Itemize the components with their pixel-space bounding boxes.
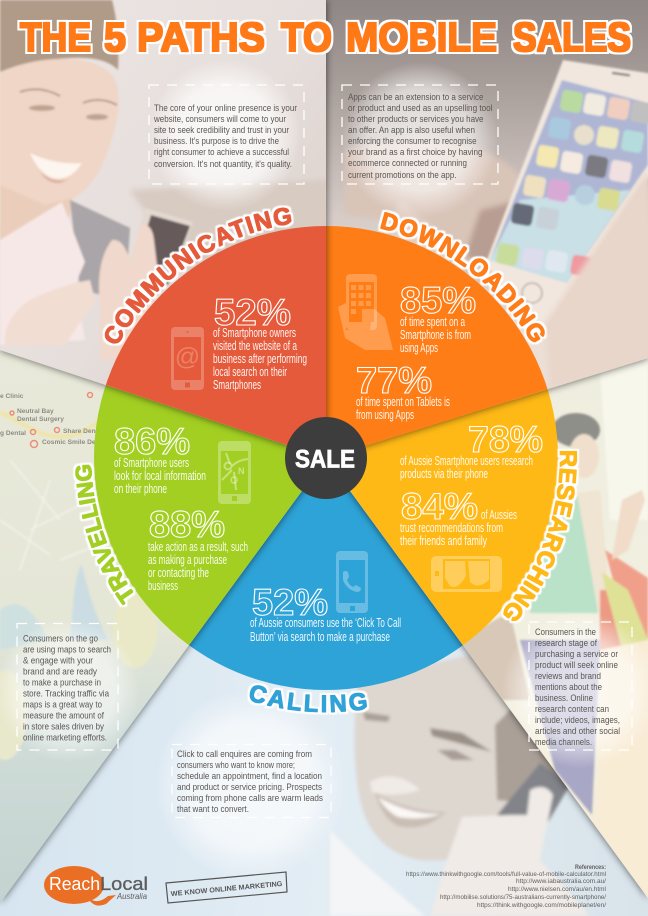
title: 5: [104, 14, 126, 60]
panel: researching background and wedge: [346, 358, 648, 900]
map labels: Share Den: [63, 428, 96, 435]
stat block: travelling 86%: of Smartphone users: [114, 456, 189, 470]
title: THE: [20, 14, 91, 60]
map labels: [0, 392, 96, 448]
stat block: travelling 86%: look for local information: [114, 469, 206, 483]
title: SALES: [513, 14, 631, 60]
references: http://www.nielsen.com/au/en.html: [508, 887, 606, 893]
references: http://mobilise.solutions/75-australians-currently-smartphone/: [440, 895, 606, 901]
text block: travelling description: store. Tracking traffic via: [23, 688, 110, 699]
label: downloading: DOWNLOADING: [378, 210, 548, 345]
text block: travelling description: [17, 624, 118, 750]
stat block: downloading 77%: from using Apps: [356, 408, 414, 422]
text block: travelling description: online marketing efforts.: [23, 732, 107, 743]
text block: travelling description: maps is a great way to: [23, 699, 102, 710]
text block: communicating description: website, consumers will come to your: [153, 114, 287, 125]
stat block: downloading 85%: 85%: [400, 280, 476, 321]
text block: communicating description: site to seek credibility and trust in your: [154, 125, 290, 136]
center badge: sale: [285, 417, 367, 499]
text block: researching description: research stage of: [535, 638, 597, 649]
text block: calling description: coming from phone calls are warm leads: [177, 793, 323, 804]
text block: researching description: media channels.: [535, 737, 592, 748]
text block: travelling description: measure the amount of: [23, 710, 104, 721]
references: [406, 865, 606, 909]
stat block: travelling 88%: as making a purchase: [148, 553, 227, 567]
text block: researching description: include; videos, images,: [535, 715, 620, 726]
text block: travelling description: & engage with your: [23, 655, 94, 666]
text block: communicating description: The core of your online presence is your: [154, 103, 298, 114]
stat block: calling 52%: [250, 582, 401, 644]
stat block: communicating 52%: local search on their: [213, 365, 287, 379]
logo: ReachLocal Australia: Australia: [116, 892, 148, 901]
icon: hand holding phone with apps: [338, 274, 393, 350]
logo: ReachLocal Australia: Reach: [49, 874, 100, 894]
stat block: researching 84%: of Aussies: [481, 508, 517, 522]
stat block: downloading 77%: [356, 360, 450, 422]
panel: travelling background and wedge: [0, 350, 306, 904]
panel: downloading background and wedge: [326, 0, 648, 452]
text block: researching description: Consumers in the: [535, 627, 596, 638]
text block: researching description: [529, 622, 632, 750]
stat block: travelling 88%: 88%: [149, 504, 225, 545]
text block: calling description: that want to convert.: [177, 804, 249, 815]
text block: researching description: product will seek online: [535, 660, 618, 671]
stat block: downloading 85%: [400, 280, 476, 355]
references: http://www.iabaustralia.com.au/: [516, 879, 606, 885]
text block: communicating description: conversion. It's not quantity, it's quality.: [154, 159, 292, 170]
references: https://www.thinkwithgoogle.com/tools/full-value-of-mobile-calculator.html: [406, 872, 606, 878]
logo: ReachLocal Australia: Local: [100, 874, 148, 894]
text block: researching description: business. Online: [535, 693, 593, 704]
label: researching: RESEARCHING: [500, 448, 580, 624]
label: travelling: TRAVELLING: [72, 462, 136, 608]
stat block: researching 84%: [400, 486, 517, 548]
text block: travelling description: Consumers on the go: [23, 633, 98, 644]
map labels: e Clinic: [0, 393, 24, 400]
stat block: travelling 86%: 86%: [114, 421, 190, 462]
label: calling: CALLING: [248, 683, 370, 715]
text block: researching description: mentions about the: [535, 682, 602, 693]
text block: communicating description: business. It's purpose is to drive the: [154, 136, 279, 147]
map labels: g Dental: [0, 430, 26, 437]
center badge: sale: SALE: [295, 446, 355, 474]
title: PATHS: [137, 14, 265, 60]
stat block: travelling 86%: on their phone: [114, 482, 167, 496]
stat block: downloading 85%: of time spent on a: [400, 315, 465, 329]
text block: downloading description: or product and used as an upselling tool: [348, 103, 492, 114]
stat block: communicating 52%: Smartphones: [213, 378, 261, 392]
stat block: downloading 77%: 77%: [356, 360, 432, 401]
icon: phone with map: N: [238, 466, 244, 476]
stat block: travelling 88%: business: [148, 579, 178, 593]
stat block: researching 84%: trust recommendations from: [400, 521, 503, 535]
stat block: researching 78%: [400, 419, 543, 481]
stat block: communicating 52%: visited the website of a: [213, 339, 297, 353]
map labels: Dental Surgery: [17, 416, 64, 423]
stat block: researching 78%: of Aussie Smartphone users research: [400, 454, 533, 468]
stat block: travelling 88%: [148, 504, 248, 593]
text block: calling description: consumers who want to know more;: [177, 760, 295, 771]
text block: researching description: reviews and brand: [535, 671, 601, 682]
stat block: researching 78%: products via their phone: [400, 467, 488, 481]
panel: calling background and wedge: [0, 491, 648, 916]
text block: travelling description: are using maps to search: [23, 644, 111, 655]
stat block: calling 52%: Button’ via search to make a purchase: [250, 630, 390, 644]
references: References:: [575, 865, 606, 871]
text block: calling description: schedule an appointment, find a location: [177, 771, 322, 782]
stamp: we know online marketing: WE KNOW ONLINE MARKETING: [171, 881, 283, 898]
panel: communicating background and wedge: [0, 0, 332, 450]
icon: phone with at sign: @: [175, 343, 200, 371]
stat block: researching 84%: their friends and family: [400, 534, 487, 548]
icon: phone with map: [218, 441, 251, 504]
stat block: downloading 77%: of time spent on Tablets is: [356, 395, 450, 409]
label: communicating: COMMUNICATING: [102, 205, 294, 346]
map labels: Neutral Bay: [17, 408, 54, 415]
stat block: travelling 88%: or contacting the: [148, 566, 209, 580]
stat block: calling 52%: 52%: [252, 582, 328, 623]
title: [20, 14, 631, 60]
text block: travelling description: to make a purchase in: [23, 677, 101, 688]
stat block: travelling 88%: take action as a result, such: [148, 540, 248, 554]
icon: phone with handset: [336, 551, 368, 613]
stat block: communicating 52%: of Smartphone owners: [213, 326, 296, 340]
stat block: downloading 85%: Smartphone is from: [400, 328, 471, 342]
text block: downloading description: your brand as a first choice by having: [348, 147, 482, 158]
text block: downloading description: to other products or services you have: [348, 114, 484, 125]
text block: researching description: research content can: [535, 704, 609, 715]
stat block: downloading 85%: using Apps: [400, 341, 438, 355]
title: MOBILE: [346, 14, 497, 60]
stat block: communicating 52%: business after performing: [213, 352, 307, 366]
text block: downloading description: an offer. An app is also useful when: [348, 125, 475, 136]
text block: travelling description: in store sales driven by: [23, 721, 104, 732]
stat block: calling 52%: of Aussie consumers use the ‘Click To Call: [250, 616, 401, 630]
illustration: smartphone: [485, 60, 648, 330]
icon: landscape phone with two faces: [431, 556, 502, 592]
stat block: researching 78%: 78%: [468, 419, 543, 460]
text block: downloading description: Apps can be an extension to a service: [348, 92, 484, 103]
icon: phone with at sign: [171, 327, 204, 390]
references: https://think.withgoogle.com/mobileplanet/en/: [477, 903, 606, 909]
text block: communicating description: right consumer to achieve a successful: [154, 147, 289, 158]
text block: calling description: [172, 744, 331, 818]
text block: travelling description: brand and are ready: [23, 666, 97, 677]
text block: calling description: Click to call enquires are coming from: [177, 749, 312, 760]
logo: ReachLocal Australia: [44, 866, 148, 906]
text block: calling description: and product or service pricing. Prospects: [177, 782, 322, 793]
title: TO: [281, 14, 332, 60]
text block: downloading description: current promotions on the app.: [348, 170, 456, 181]
map labels: Cosmic Smile De: [42, 439, 96, 446]
stamp: we know online marketing: [166, 872, 287, 903]
stat block: communicating 52%: 52%: [214, 292, 291, 333]
stat block: travelling 86%: [114, 421, 206, 496]
text block: downloading description: ecommerce connected or running: [348, 158, 467, 169]
stat block: communicating 52%: [213, 292, 307, 392]
text block: researching description: purchasing a service or: [535, 649, 619, 660]
text block: downloading description: [342, 85, 498, 184]
text block: researching description: articles and other social: [535, 726, 620, 737]
text block: downloading description: enforcing the consumer to recognise: [348, 136, 476, 147]
stat block: researching 84%: 84%: [401, 486, 478, 527]
text block: communicating description: [149, 85, 304, 184]
